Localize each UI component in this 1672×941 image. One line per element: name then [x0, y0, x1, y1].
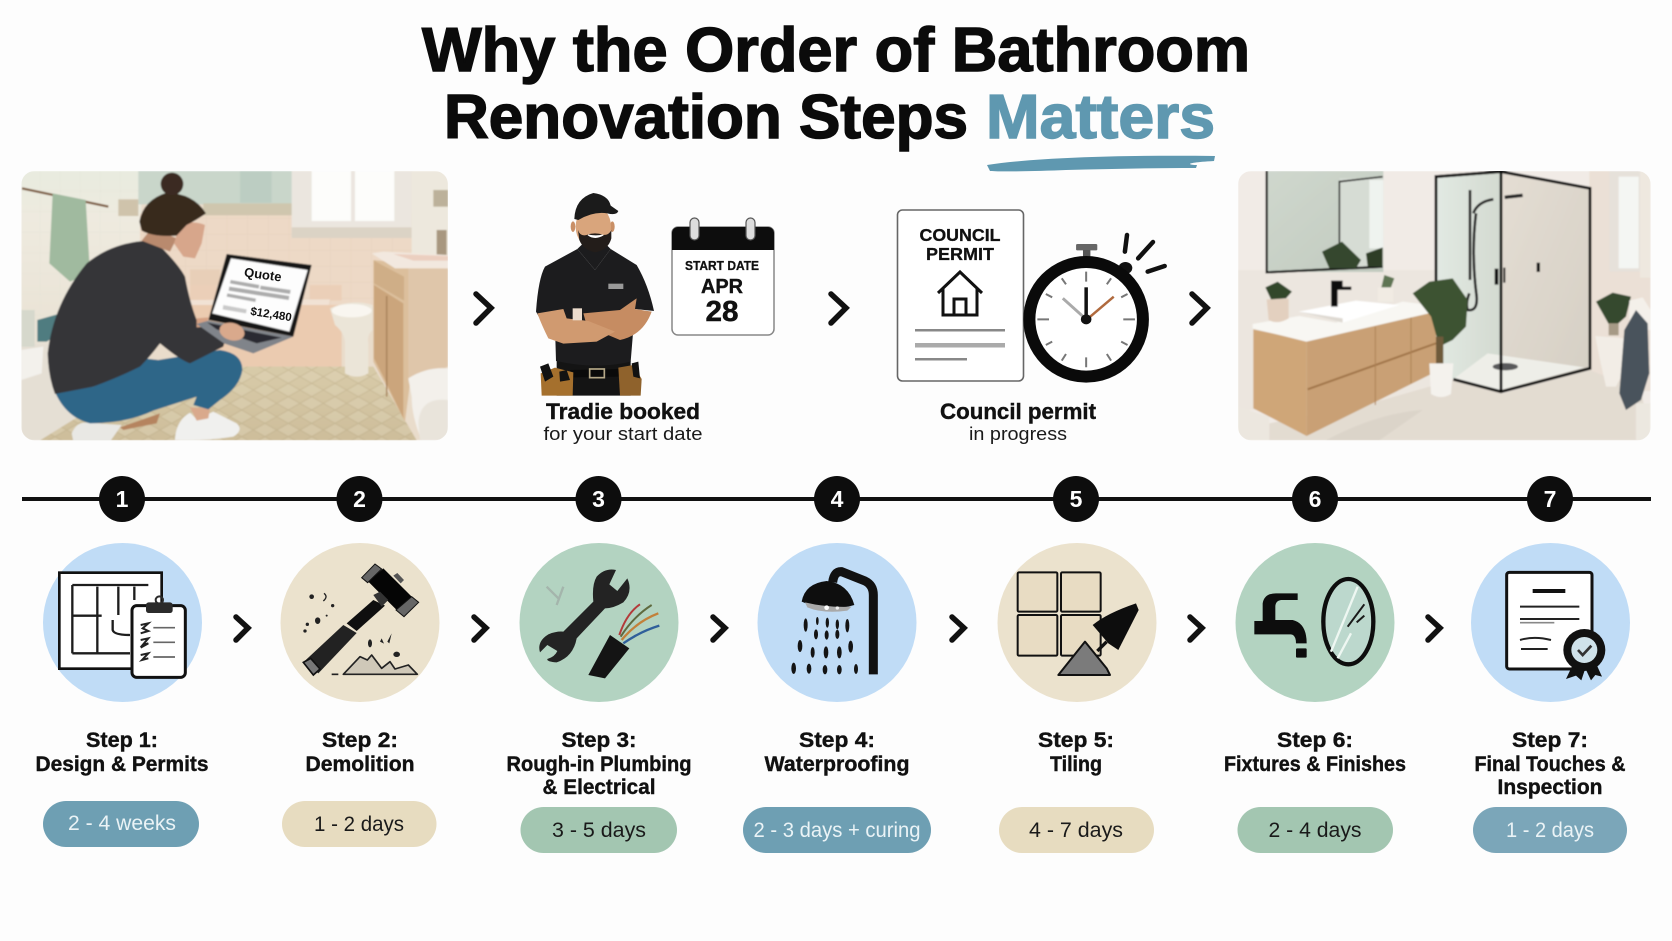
step 1 label: Step 1:: [86, 729, 158, 752]
step 6 label: Fixtures & Finishes: [1224, 753, 1406, 776]
icon: step 5 tiles and trowel: [998, 543, 1156, 702]
icon: step 3 spanner and wires: [520, 543, 678, 702]
step 6 duration pill: 2 - 4 days: [1268, 819, 1362, 842]
title: [422, 16, 1250, 152]
caption: council permit: [940, 399, 1097, 444]
step 7 label: Step 7:: [1512, 729, 1588, 752]
step 1 duration pill: 2 - 4 weeks: [68, 812, 176, 835]
step 2 label: [306, 729, 414, 776]
caption: tradie booked: for your start date: [544, 423, 702, 444]
step 5 label: Step 5:: [1038, 729, 1114, 752]
number badge 1: [99, 476, 145, 522]
calendar icon: start date: START DATE: [685, 258, 759, 273]
step 2 duration pill: [282, 801, 436, 847]
step 7 label: Final Touches &: [1474, 753, 1626, 776]
stopwatch icon: [1029, 235, 1165, 377]
step 1 label: [36, 729, 208, 776]
step 7 label: [1474, 729, 1626, 799]
step 4 duration pill: [743, 807, 931, 853]
step 2 label: Step 2:: [322, 729, 398, 752]
step 1 duration pill: [43, 801, 199, 847]
number badge 1: 1: [116, 486, 129, 512]
title underline brush stroke: [987, 156, 1215, 171]
step 5 duration pill: [999, 807, 1154, 853]
number badge 6: [1292, 476, 1338, 522]
caption: tradie booked: [544, 399, 702, 444]
house icon: [938, 272, 982, 315]
icon: step 2 sledgehammer and rubble: [280, 543, 440, 702]
icon: step 4 shower head with water: [758, 543, 916, 702]
number badge 6: 6: [1309, 486, 1321, 512]
step 4 label: [764, 729, 910, 776]
step 3 label: Rough-in Plumbing: [506, 753, 692, 776]
caption: council permit: in progress: [969, 423, 1067, 444]
council permit document: [898, 210, 1024, 381]
number badge 2: [336, 476, 382, 522]
step 5 label: Tiling: [1050, 753, 1102, 776]
number badge 4: [814, 476, 860, 522]
step 2 duration pill: 1 - 2 days: [314, 813, 404, 836]
title: Why the Order of Bathroom: [422, 16, 1250, 85]
title: Renovation Steps: [444, 83, 968, 152]
timeline line: [22, 497, 1651, 501]
caption: council permit: Council permit: [940, 399, 1097, 424]
icon: step 7 certificate with seal: [1471, 543, 1630, 702]
calendar icon: start date: [672, 218, 774, 335]
calendar icon: start date: APR: [701, 276, 744, 298]
step 5 label: [1038, 729, 1114, 776]
caption: tradie booked: Tradie booked: [546, 399, 700, 424]
step arrows: [236, 617, 1440, 640]
arrow: [831, 294, 846, 323]
step 3 label: & Electrical: [542, 776, 656, 799]
step 7 duration pill: 1 - 2 days: [1506, 819, 1594, 842]
calendar icon: start date: 28: [706, 296, 738, 328]
number badge 2: 2: [353, 486, 366, 512]
step 6 label: [1224, 729, 1406, 776]
photo: finished modern bathroom: [1238, 171, 1651, 440]
step 5 duration pill: 4 - 7 days: [1029, 819, 1123, 842]
number badge 4: 4: [831, 486, 844, 512]
step 1 label: Design & Permits: [36, 753, 208, 776]
tradie illustration: [536, 193, 654, 396]
council permit document: PERMIT: [926, 244, 994, 264]
council permit document: COUNCIL: [920, 225, 1001, 245]
number badge 3: [576, 476, 622, 522]
arrow: [1192, 294, 1207, 323]
step 6 duration pill: [1238, 807, 1393, 853]
icon: step 1 floor plan and checklist: [43, 543, 202, 702]
number badge 5: 5: [1070, 486, 1083, 512]
step 3 label: [506, 729, 692, 799]
number badge 5: [1053, 476, 1099, 522]
icon: step 6 tap and mirror: [1236, 543, 1394, 702]
step 3 duration pill: [520, 807, 677, 853]
step 4 label: Waterproofing: [764, 753, 910, 776]
number badge 3: 3: [592, 486, 605, 512]
title: Matters: [986, 83, 1215, 152]
number badge 7: [1527, 476, 1573, 522]
step 3 duration pill: 3 - 5 days: [552, 819, 646, 842]
step 3 label: Step 3:: [562, 729, 636, 752]
number badge 7: 7: [1544, 486, 1556, 512]
step 6 label: Step 6:: [1277, 729, 1353, 752]
step 2 label: Demolition: [306, 753, 414, 776]
step 4 label: Step 4:: [799, 729, 875, 752]
photo: old bathroom with woman reviewing quote: $12,480: [250, 306, 292, 324]
arrow: [476, 294, 491, 323]
step 7 duration pill: [1473, 807, 1627, 853]
step 7 label: Inspection: [1498, 776, 1602, 799]
photo: old bathroom with woman reviewing quote: [21, 171, 448, 442]
laptop quote text: Quote: [243, 264, 283, 285]
step 4 duration pill: 2 - 3 days + curing: [754, 819, 920, 842]
